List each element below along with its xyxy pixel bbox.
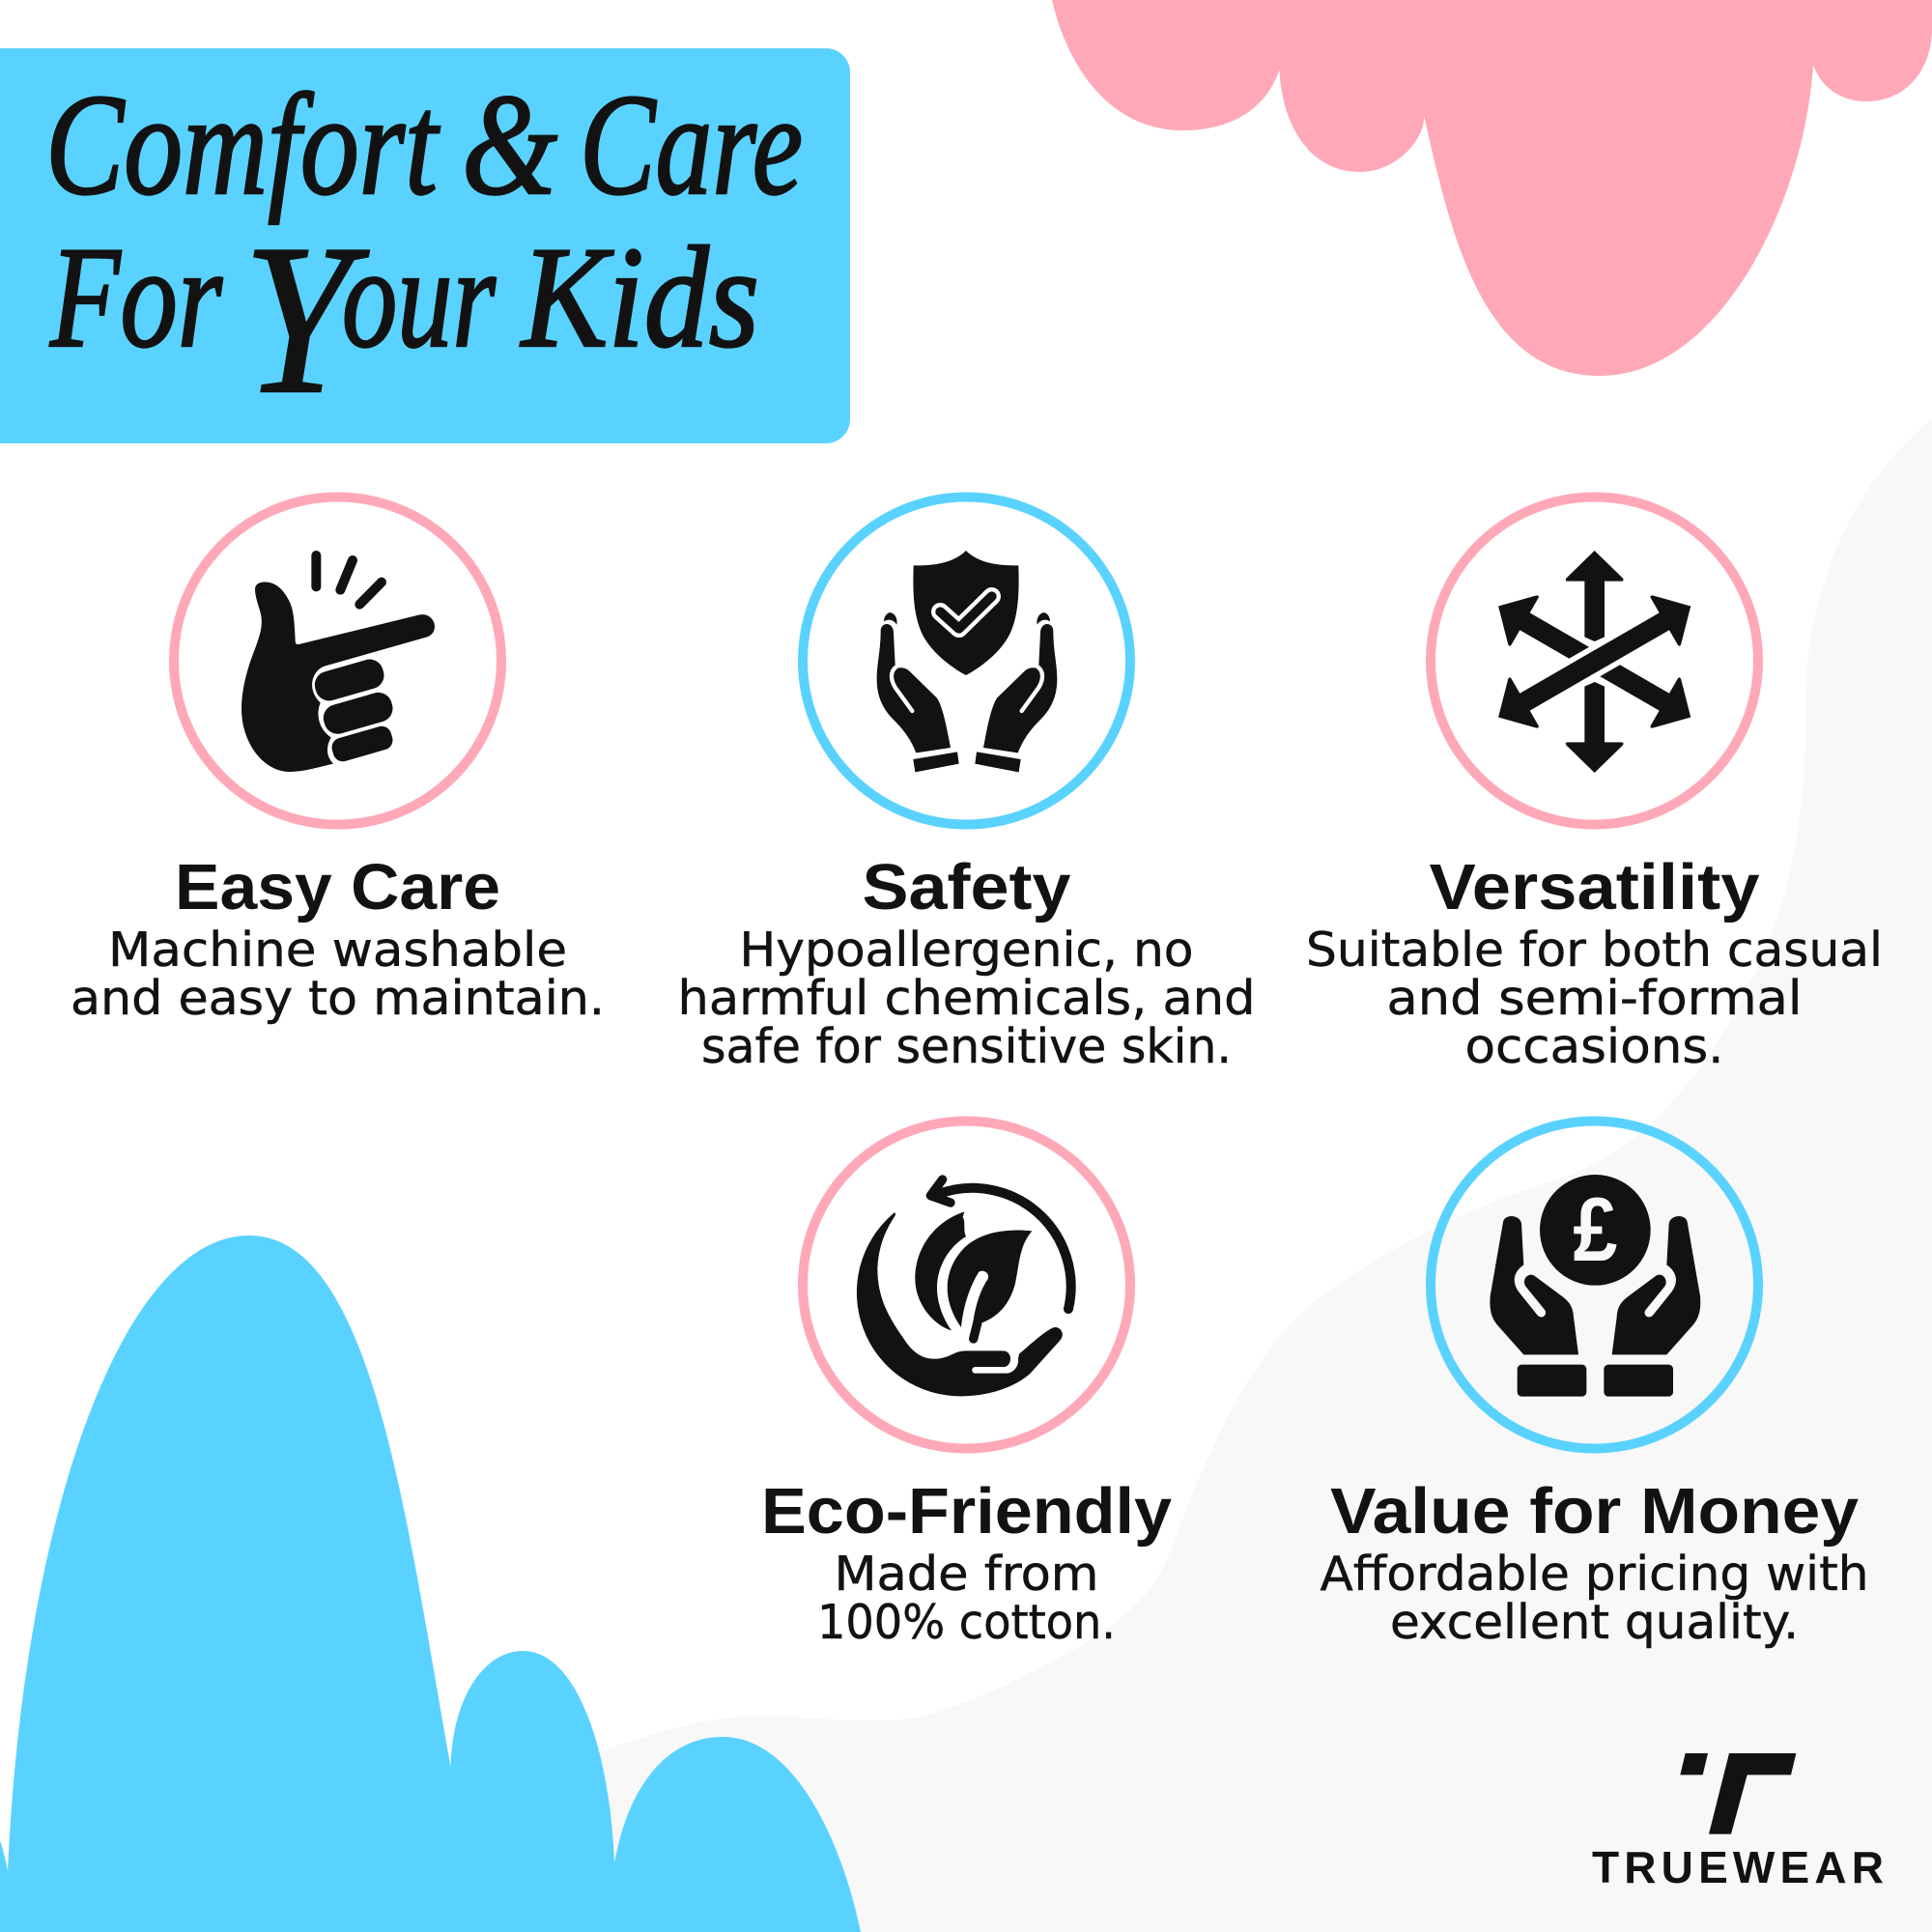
heading: Safety <box>862 851 1070 923</box>
background: grey blob <box>483 419 1932 1932</box>
heading: Versatility <box>1430 851 1760 923</box>
description: harmful chemicals, and <box>678 971 1256 1026</box>
icon: hand, leaves and cycle arrow <box>857 1179 1071 1396</box>
description: and semi-formal <box>1387 971 1803 1026</box>
background: pink drip shape <box>1052 0 1932 376</box>
ring <box>1431 1121 1758 1449</box>
logo: TrueWear <box>1592 1753 1884 1892</box>
title line 2 <box>49 201 759 439</box>
description: Hypoallergenic, no <box>740 923 1194 978</box>
title line 2: Y <box>243 201 370 439</box>
description: Machine washable <box>108 923 567 978</box>
description <box>1320 1547 1868 1650</box>
heading: Value for Money <box>1330 1475 1859 1548</box>
description <box>71 923 605 1026</box>
feature: Eco-Friendly <box>761 1121 1172 1650</box>
description <box>1306 923 1883 1074</box>
description: occasions. <box>1464 1019 1723 1074</box>
description: Affordable pricing with <box>1320 1547 1868 1602</box>
logo wordmark: TRUEWEAR <box>1592 1842 1884 1892</box>
icon: six-way arrows <box>1484 551 1705 773</box>
ring <box>803 1121 1130 1449</box>
title line 1 <box>45 65 803 225</box>
title line 2: Kids <box>520 217 759 378</box>
title line 2: our <box>342 217 496 378</box>
description: 100% cotton. <box>817 1595 1116 1650</box>
ring <box>803 497 1130 825</box>
feature: Value for Money <box>1320 1121 1868 1650</box>
description: excellent quality. <box>1390 1595 1799 1650</box>
description <box>817 1547 1116 1650</box>
description: and easy to maintain. <box>71 971 605 1026</box>
heading: Easy Care <box>175 851 500 923</box>
ring <box>174 497 501 825</box>
icon: finger snap hand <box>242 555 435 772</box>
title panel <box>0 48 850 443</box>
logo mark <box>1680 1753 1796 1834</box>
icon: hands holding pound coin: £ <box>1573 1179 1617 1280</box>
icon: hands holding pound coin <box>1490 1175 1700 1397</box>
background: blue hills shape <box>0 1236 861 1932</box>
feature: Safety <box>678 497 1256 1074</box>
icon: hands with shield <box>877 551 1057 772</box>
ring <box>1431 497 1758 825</box>
heading: Eco-Friendly <box>761 1475 1172 1548</box>
feature: Easy Care <box>71 497 605 1026</box>
feature: Versatility <box>1306 497 1883 1074</box>
description: Suitable for both casual <box>1306 923 1883 978</box>
title line 2: For <box>49 217 222 378</box>
description: Made from <box>835 1547 1099 1602</box>
title line 1: & <box>462 65 557 225</box>
title line 1: Care <box>580 65 803 225</box>
description <box>678 923 1256 1074</box>
description: safe for sensitive skin. <box>701 1019 1232 1074</box>
title line 1: Comfort <box>45 65 440 225</box>
